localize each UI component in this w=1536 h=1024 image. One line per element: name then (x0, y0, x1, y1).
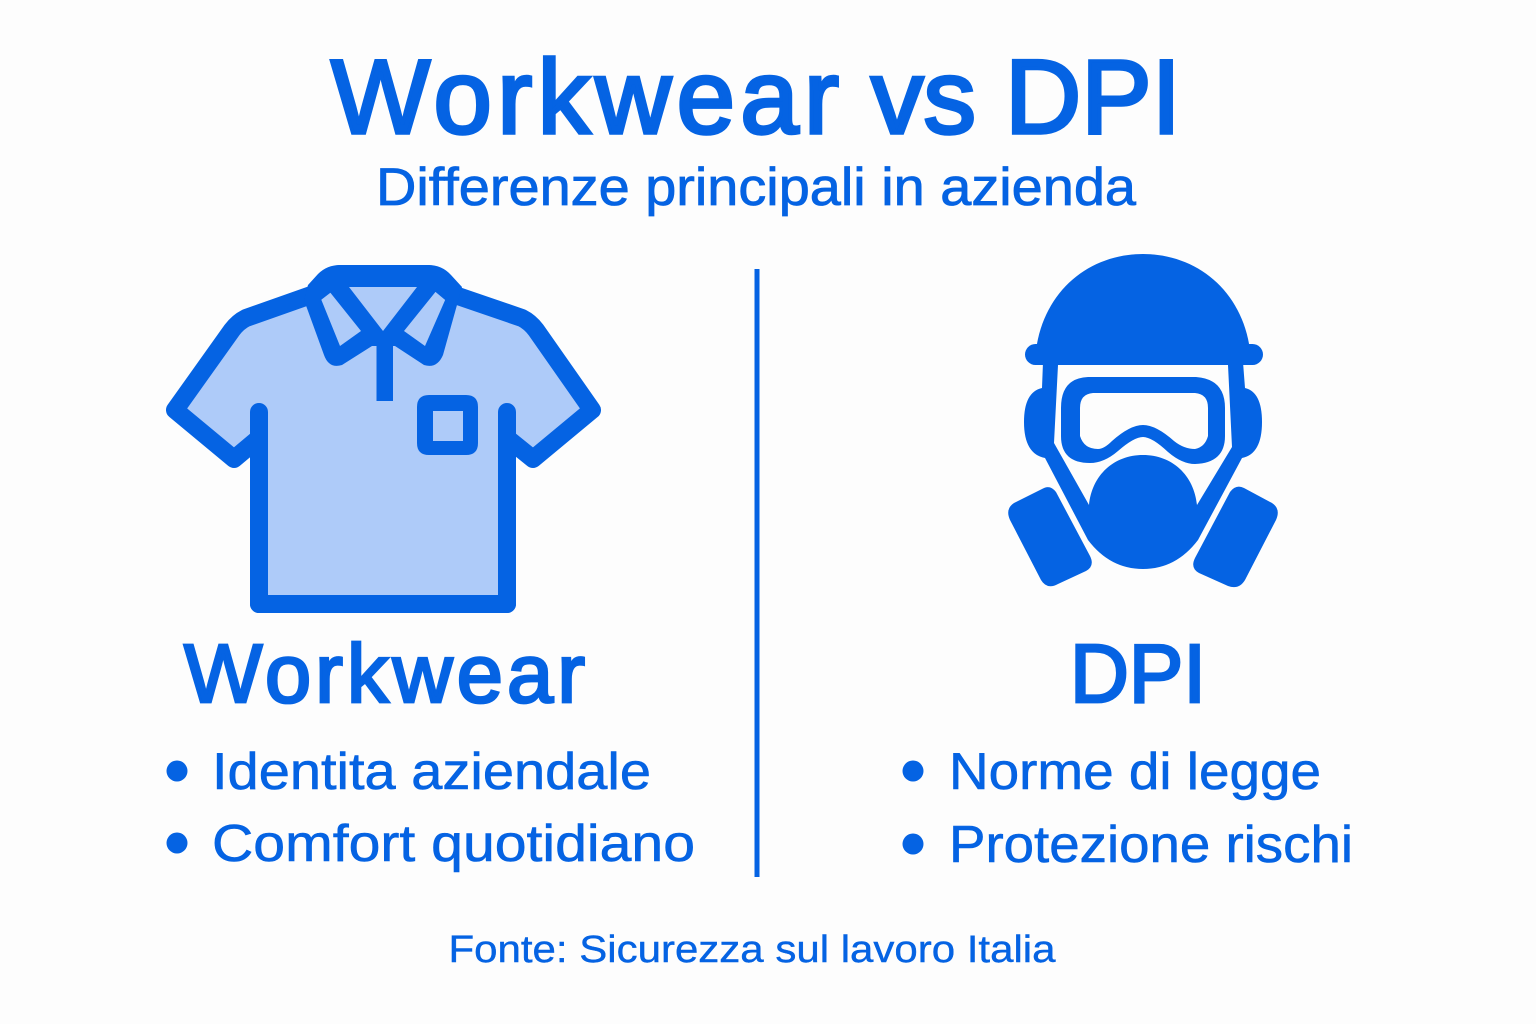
list: Workwear: Identita aziendale (212, 743, 651, 801)
title (331, 39, 1181, 156)
list: DPI (902, 743, 1353, 874)
subtitle: Differenze principali in azienda (376, 158, 1137, 217)
heading: DPI: DPI (1070, 627, 1206, 720)
vertical divider (754, 269, 760, 877)
source note: Fonte: Sicurezza sul lavoro Italia (448, 929, 1056, 971)
icon: respirator mask with helmet (1008, 254, 1278, 587)
title: Workwear (331, 39, 839, 156)
heading: Workwear: Workwear (184, 627, 585, 720)
list: Workwear: Comfort quotidiano (212, 815, 695, 873)
icon: polo shirt (175, 265, 592, 604)
list: Workwear (166, 743, 695, 873)
list: DPI: Norme di legge (949, 743, 1321, 801)
list: DPI: Protezione rischi (949, 816, 1353, 874)
title: DPI (1005, 39, 1181, 156)
title: vs (871, 39, 976, 156)
